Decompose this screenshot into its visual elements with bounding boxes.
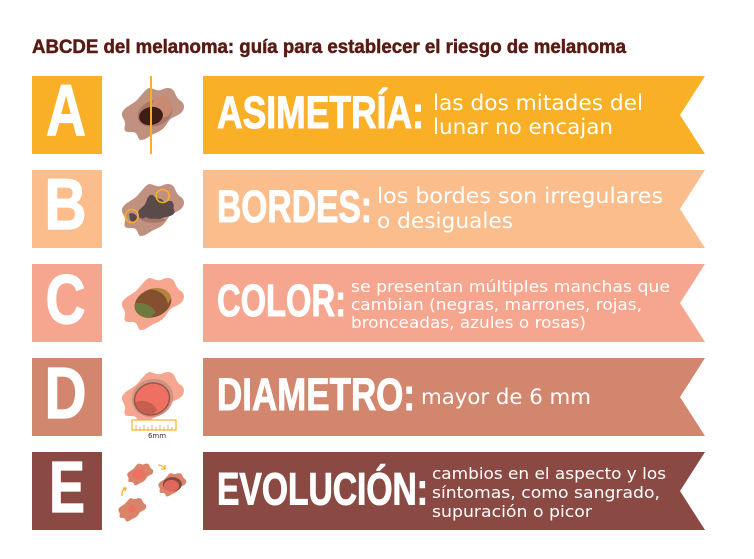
banner C: bronceadas, azules o rosas): [351, 313, 586, 332]
banner E: supuración o picor: [432, 502, 592, 521]
banner A: [203, 76, 705, 154]
icon: mole with ruler: 6mm: [148, 432, 166, 440]
banner D: [203, 358, 705, 436]
banner B: [203, 170, 705, 248]
stage 3: [158, 473, 186, 496]
icon: irregular border mole: [122, 184, 184, 236]
letter box E: [32, 448, 102, 530]
banner E: [203, 452, 705, 530]
letter box D: D: [44, 354, 86, 434]
title: ABCDE del melanoma: guía para establecer el riesgo de melanoma: [32, 37, 626, 58]
banner B: BORDES:: [217, 181, 372, 232]
icon: mole with ruler: [122, 372, 184, 440]
row A: asimetría: [32, 71, 705, 154]
stage 2: [127, 464, 153, 485]
banner A: las dos mitades del: [433, 91, 643, 115]
icon: multicolor mole: [122, 278, 184, 330]
banner C: cambian (negras, marrones, rojas,: [351, 295, 642, 314]
banner A: ASIMETRÍA:: [217, 87, 424, 138]
banner C: se presentan múltiples manchas que: [351, 277, 670, 296]
letter box A: A: [46, 71, 86, 151]
banner B: los bordes son irregulares: [377, 184, 663, 208]
banner D: DIAMETRO:: [217, 369, 415, 420]
letter box C: [32, 260, 102, 342]
banner C: [203, 264, 705, 342]
banner C: COLOR:: [217, 275, 346, 326]
arrow right: [158, 465, 165, 469]
row B: bordes: [32, 165, 705, 248]
icon: evolving moles: [118, 464, 186, 522]
banner A: lunar no encajan: [433, 115, 613, 139]
banner B: o desiguales: [377, 209, 513, 233]
banner D: mayor de 6 mm: [421, 385, 591, 409]
banner E: síntomas, como sangrado,: [432, 483, 660, 502]
row C: color: [32, 260, 705, 342]
banner E: EVOLUCIÓN:: [217, 464, 428, 514]
letter box B: B: [44, 165, 86, 245]
letter box C: C: [46, 260, 86, 338]
row E: evolución: [32, 448, 705, 530]
icon: asymmetric mole: [122, 76, 184, 154]
arrow up: [122, 488, 126, 496]
stage 1: [118, 498, 146, 522]
letter box E: E: [49, 448, 85, 528]
row D: diametro: [32, 354, 705, 440]
banner E: cambios en el aspecto y los: [432, 464, 666, 483]
